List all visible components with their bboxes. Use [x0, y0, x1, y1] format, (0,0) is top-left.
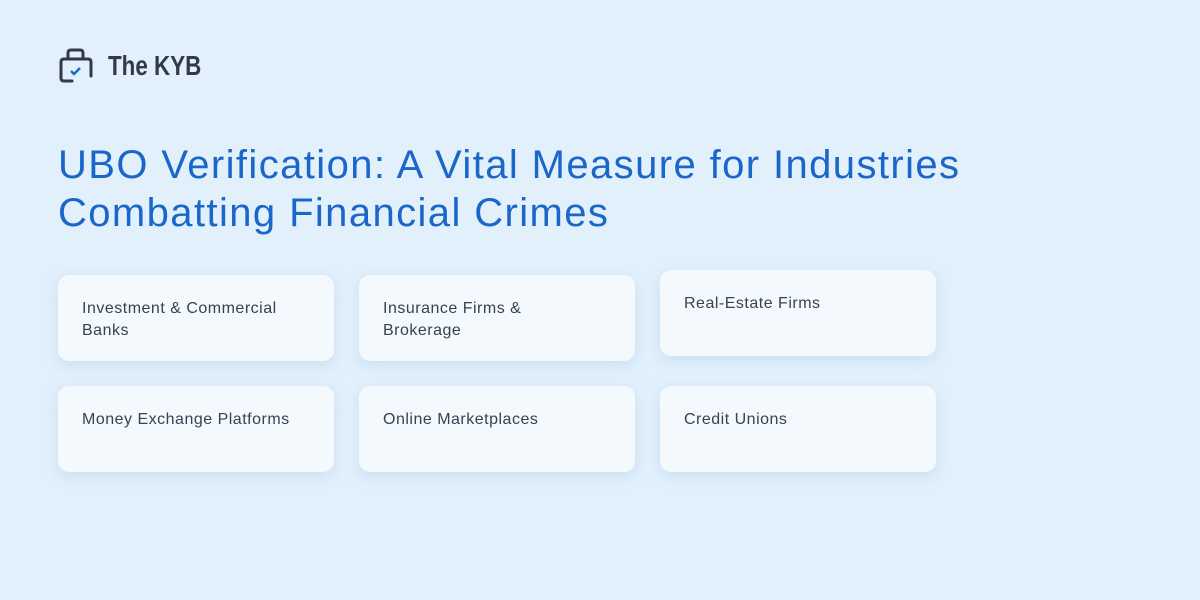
card: money exchange: Money Exchange Platforms [82, 411, 290, 428]
card: banks: Banks [82, 322, 129, 339]
card: insurance: Insurance Firms & [383, 300, 521, 317]
card: credit unions: Credit Unions [684, 411, 787, 428]
logo text: The KYB [108, 50, 201, 81]
card: insurance [359, 275, 635, 361]
title: UBO Verification: A Vital Measure for Industries [58, 143, 960, 187]
card: insurance: Brokerage [383, 322, 461, 339]
icon: briefcase [60, 48, 92, 82]
card: marketplaces: Online Marketplaces [383, 411, 538, 428]
card: marketplaces [359, 386, 635, 472]
card: banks: Investment & Commercial [82, 300, 277, 317]
logo [60, 48, 201, 82]
title: Combatting Financial Crimes [58, 191, 609, 235]
card: real estate [660, 270, 936, 356]
card: real estate: Real-Estate Firms [684, 295, 821, 312]
card: money exchange [58, 386, 334, 472]
card: credit unions [660, 386, 936, 472]
card: banks [58, 275, 334, 361]
title [58, 143, 960, 235]
